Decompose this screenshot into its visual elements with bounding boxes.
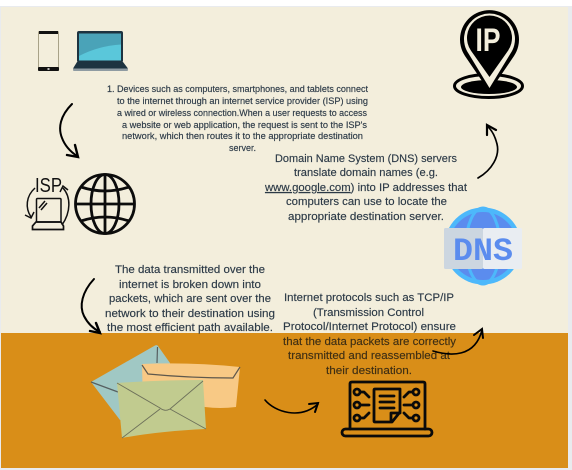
text: step 3 data packets: network to their destination using [105,308,275,320]
text: step 4 protocols: that the data packets are correctly [283,336,457,348]
arrow: to envelopes [82,279,100,333]
icon: laptop [73,31,128,71]
icon: DNS globe: DNS [453,233,513,270]
text: step 4 protocols: (Transmission Control [313,307,424,319]
text: step 3 data packets: The data transmitted over the [115,264,265,276]
text: step 4 protocols: Internet protocols such as TCP/IP [284,292,454,304]
icon: smartphone [38,31,59,71]
text: step 3 data packets: the most efficient path available. [107,322,273,334]
text: step 3 data packets [105,264,275,334]
text: step 4 protocols: transmitted and reassembled at [288,350,450,362]
text: step 2 DNS: appropriate destination server. [288,211,444,223]
icon: globe [75,174,135,234]
icon: laptop with document and circuits [342,382,432,436]
panel: orange band [1,333,568,468]
text: step 2 DNS: Domain Name System (DNS) servers [275,153,457,165]
text: step 1 devices [107,84,369,153]
text: step 2 DNS [264,153,467,223]
text: step 2 DNS: translate domain names (e.g. [294,167,438,179]
text: step 4 protocols [283,292,457,377]
arrow: DNS to IP [478,125,498,178]
text: step 2 DNS: computers can use to locate the [286,196,447,208]
text: step 3 data packets: internet is broken down into [119,279,261,291]
icon: ISP laptop [25,175,69,230]
text: step 1 devices: a website or web application, the request is sent to the ISP's [122,120,368,130]
label: ISP: ISP [35,175,62,197]
text: step 3 data packets: packets, which are sent over the [109,293,271,305]
text: step 4 protocols: their destination. [326,365,412,377]
icon: envelopes [91,345,240,438]
arrow: devices to ISP [60,104,78,157]
icon: IP location pin: IP [476,22,500,58]
panel: cream background [1,7,568,333]
text: step 1 devices: server. [229,143,256,153]
text: step 1 devices: a wired or wireless connection.When a user requests to access [117,108,368,118]
text: step 2 DNS: www.google.com) into IP addresses that [264,182,467,194]
arrow: envelopes to protocols [265,400,318,413]
icon: IP location pin [454,10,522,98]
text: step 4 protocols: Protocol/Internet Protocol) ensure [283,321,456,333]
text: step 1 devices: to the internet through an internet service provider (ISP) using [117,96,368,106]
text: step 1 devices: 1. Devices such as computers, smartphones, and tablets connect [107,84,369,94]
icon: DNS globe [444,208,522,284]
text: step 1 devices: network, which then routes it to the appropriate destination [122,131,363,141]
arrow: protocols to DNS [433,329,483,354]
